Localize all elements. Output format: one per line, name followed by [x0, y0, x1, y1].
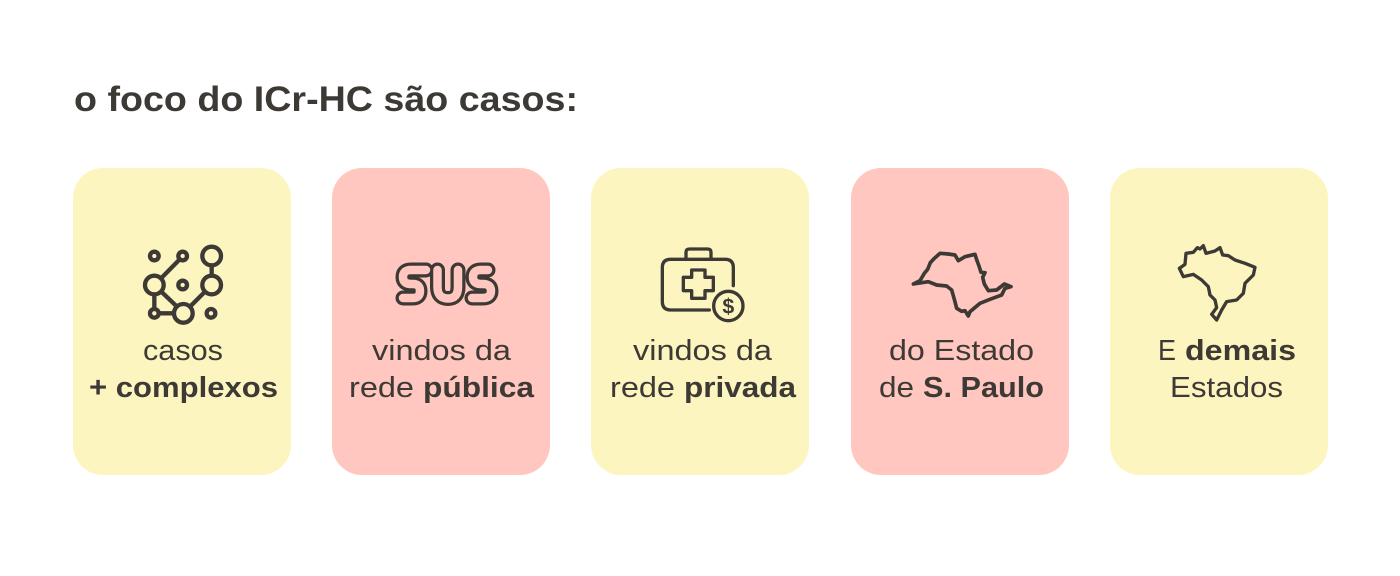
label: casos + complexos: casos [143, 335, 223, 367]
label: do Estado de S. Paulo: de [879, 372, 914, 404]
label: vindos da rede pública [349, 335, 535, 404]
label: vindos da rede privada: rede [610, 372, 675, 404]
icon: medical case with dollar: $ [722, 295, 734, 319]
label: casos + complexos [89, 335, 278, 404]
panel: demais Estados [1110, 168, 1328, 475]
label: casos + complexos: + complexos [89, 372, 278, 404]
label: vindos da rede privada [610, 335, 797, 404]
label: vindos da rede pública: rede [349, 372, 414, 404]
label: do Estado de S. Paulo: S. Paulo [923, 372, 1044, 404]
panel: rede privada [591, 168, 809, 475]
title: o foco do ICr-HC são casos: [74, 80, 578, 119]
label: vindos da rede privada: privada [684, 372, 797, 404]
icon: SUS logo [403, 270, 491, 298]
label: vindos da rede pública: pública [423, 372, 535, 404]
label: do Estado de S. Paulo: do Estado [889, 335, 1034, 367]
label: E demais Estados: E [1158, 335, 1176, 367]
icon: map of Brazil [1179, 246, 1255, 320]
label: vindos da rede pública: vindos da [372, 335, 512, 367]
label: E demais Estados [1158, 335, 1296, 404]
label: E demais Estados: Estados [1170, 372, 1283, 404]
panel: Estado de S. Paulo [851, 168, 1069, 475]
icon: medical case with dollar [662, 249, 743, 321]
icon: map of São Paulo state [913, 253, 1011, 316]
icon: connected nodes [145, 247, 221, 323]
label: do Estado de S. Paulo [879, 335, 1044, 404]
panel: casos + complexos [73, 168, 291, 475]
panel: rede pública [332, 168, 550, 475]
label: E demais Estados: demais [1185, 335, 1296, 367]
label: vindos da rede privada: vindos da [633, 335, 773, 367]
